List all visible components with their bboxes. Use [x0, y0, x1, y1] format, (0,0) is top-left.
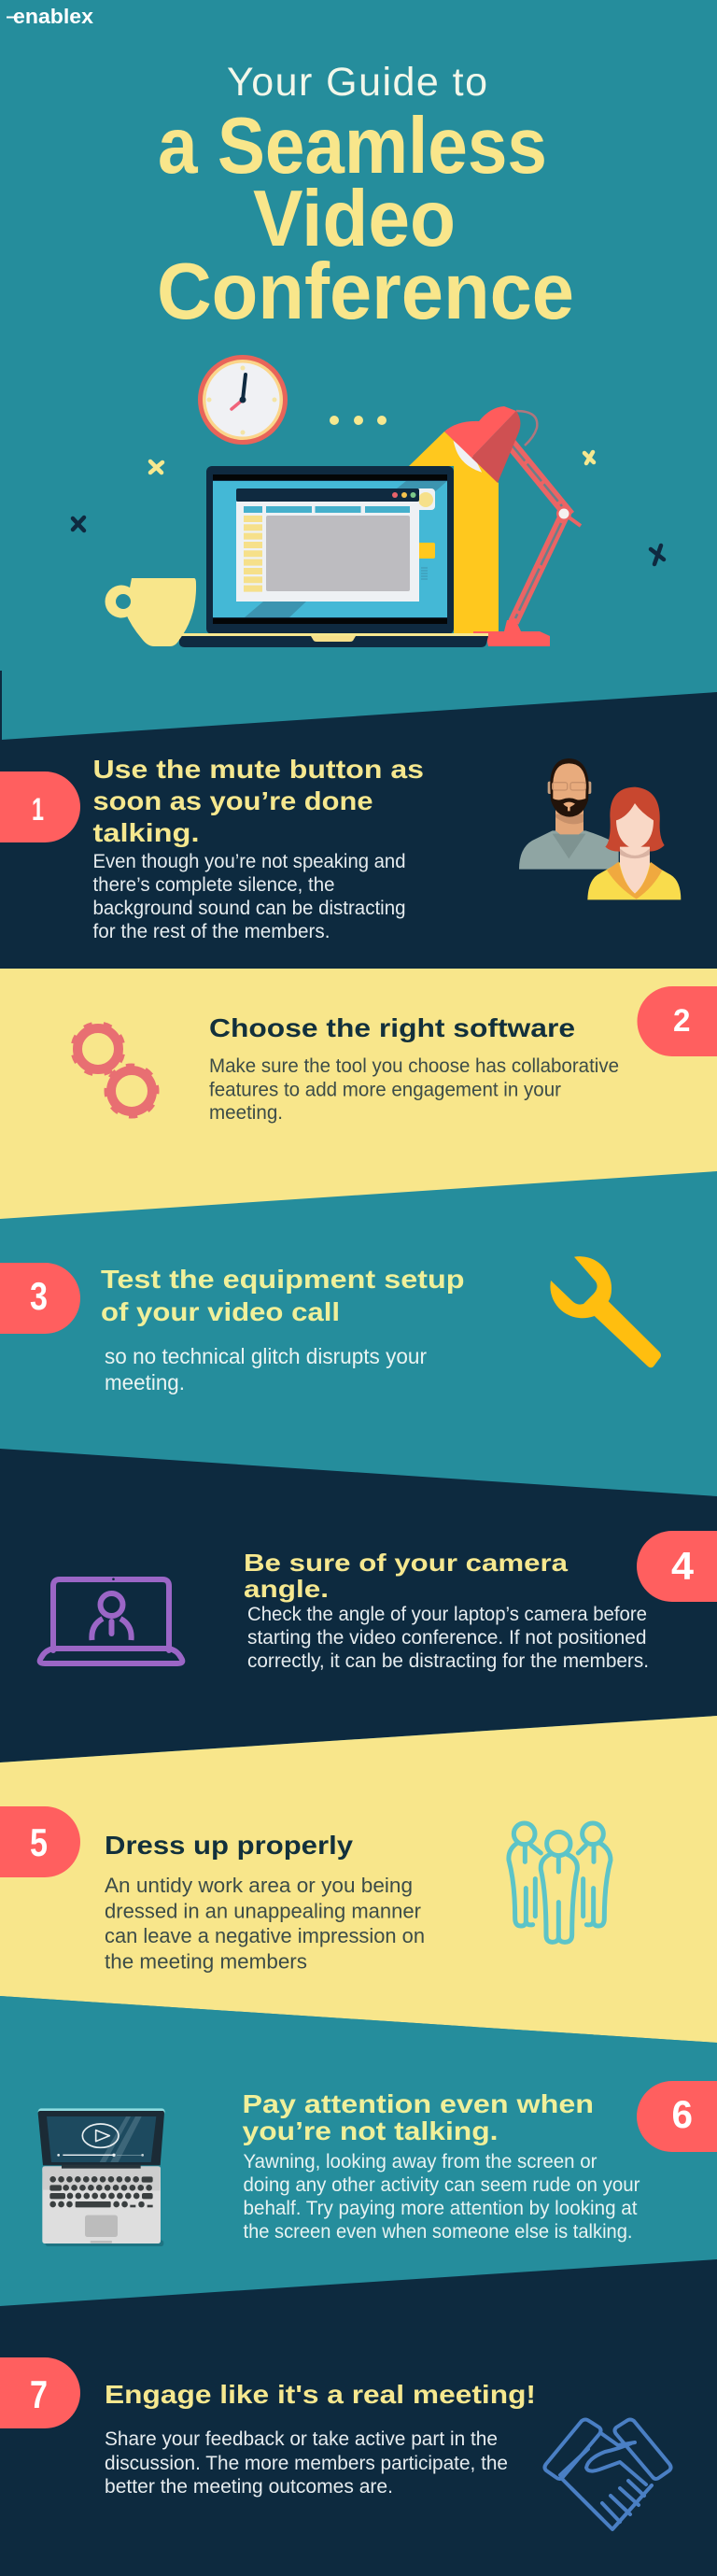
- heading: Choose the right software: [209, 1013, 575, 1042]
- panel: tip 5 dress up: [0, 1716, 717, 2043]
- logo: enablex: [13, 5, 94, 28]
- title: Video: [253, 175, 456, 263]
- body text: features to add more engagement in your: [209, 1078, 561, 1100]
- heading: [101, 1265, 464, 1326]
- body text: better the meeting outcomes are.: [105, 2475, 393, 2498]
- number badge 1: [0, 771, 80, 842]
- icon: handshake: [545, 2419, 670, 2529]
- number badge 7: 7: [30, 2372, 48, 2416]
- panel: tip 4 camera angle: [0, 1449, 717, 1762]
- heading: [243, 2089, 594, 2145]
- number badge 7: [0, 2357, 80, 2428]
- number badge 4: 4: [671, 1544, 695, 1588]
- panel: tip 3 test equipment: [0, 1256, 661, 1394]
- number badge 4: [637, 1531, 717, 1602]
- body text: Share your feedback or take active part in the: [105, 2427, 498, 2450]
- panel: tip 2 choose software: [0, 969, 717, 1219]
- body text: starting the video conference. If not positioned: [247, 1626, 646, 1649]
- title: a Seamless: [158, 102, 547, 191]
- number badge 1: 1: [32, 792, 44, 828]
- body text: An untidy work area or you being: [105, 1874, 413, 1897]
- icon: pencil: [409, 432, 499, 635]
- body text: background sound can be distracting: [93, 897, 405, 919]
- title: Your Guide to: [227, 60, 487, 105]
- heading: Test the equipment setup: [101, 1265, 464, 1294]
- body text: Even though you’re not speaking and: [93, 850, 405, 872]
- body text: the screen even when someone else is talking.: [243, 2220, 633, 2243]
- icon: wrench: [550, 1256, 661, 1367]
- heading: Use the mute button as: [93, 755, 424, 784]
- number badge 2: [637, 986, 717, 1056]
- icon: wall clock: [198, 355, 288, 445]
- number badge 3: 3: [30, 1274, 48, 1318]
- heading: you’re not talking.: [243, 2116, 499, 2145]
- body text: meeting.: [209, 1101, 283, 1124]
- body text: discussion. The more members participate, the: [105, 2452, 508, 2474]
- icon: man and woman avatars: [519, 758, 681, 899]
- icon: coffee cup: [105, 578, 196, 646]
- number badge 6: [637, 2081, 717, 2152]
- body text: the meeting members: [105, 1950, 307, 1973]
- number badge 6: 6: [672, 2092, 693, 2136]
- body text: meeting.: [105, 1370, 185, 1394]
- body text: [105, 1344, 427, 1394]
- panel: tip 7 engage: [0, 2259, 717, 2576]
- icon: three dots: [330, 416, 387, 425]
- number badge 2: 2: [673, 1003, 691, 1039]
- heading: of your video call: [101, 1297, 340, 1326]
- body text: [105, 2427, 508, 2498]
- title: Conference: [157, 248, 574, 336]
- heading: angle.: [244, 1575, 329, 1603]
- number badge 5: 5: [30, 1820, 48, 1864]
- icon: decorative crosses: [73, 452, 664, 564]
- body text: dressed in an unappealing manner: [105, 1900, 421, 1922]
- heading: Engage like it's a real meeting!: [105, 2380, 536, 2409]
- body text: [243, 2150, 640, 2243]
- heading: [244, 1549, 569, 1603]
- body text: there’s complete silence, the: [93, 873, 334, 896]
- icon: laptop: [179, 466, 488, 647]
- heading: Pay attention even when: [243, 2089, 594, 2118]
- title: [157, 60, 574, 336]
- body text: [105, 1874, 425, 1973]
- icon: desk lamp: [444, 406, 581, 646]
- heading: Dress up properly: [105, 1831, 353, 1860]
- body text: so no technical glitch disrupts your: [105, 1344, 427, 1368]
- icon: laptop playing video: [38, 2108, 165, 2246]
- icon: gears: [68, 1019, 166, 1125]
- heading: [93, 755, 424, 847]
- heading: Be sure of your camera: [244, 1549, 569, 1577]
- body text: doing any other activity can seem rude on your: [243, 2173, 640, 2196]
- heading: talking.: [93, 818, 200, 847]
- body text: [247, 1603, 649, 1672]
- body text: correctly, it can be distracting for the members.: [247, 1649, 649, 1672]
- body text: for the rest of the members.: [93, 920, 330, 942]
- body text: Make sure the tool you choose has collaborative: [209, 1054, 619, 1077]
- body text: [209, 1054, 619, 1124]
- body text: can leave a negative impression on: [105, 1924, 425, 1947]
- number badge 5: [0, 1806, 80, 1877]
- icon: laptop with person: [40, 1578, 182, 1663]
- body text: Yawning, looking away from the screen or: [243, 2150, 598, 2173]
- panel: tip 6 pay attention: [0, 1996, 717, 2306]
- body text: behalf. Try paying more attention by looking at: [243, 2197, 638, 2219]
- number badge 3: [0, 1263, 80, 1334]
- body text: Check the angle of your laptop’s camera before: [247, 1603, 647, 1625]
- heading: soon as you’re done: [93, 786, 373, 815]
- hero illustration: desk with laptop, clock, lamp and cup: [73, 355, 664, 647]
- panel: tip 1 mute button: [0, 671, 717, 971]
- icon: team of three: [509, 1823, 611, 1942]
- body text: [93, 850, 405, 942]
